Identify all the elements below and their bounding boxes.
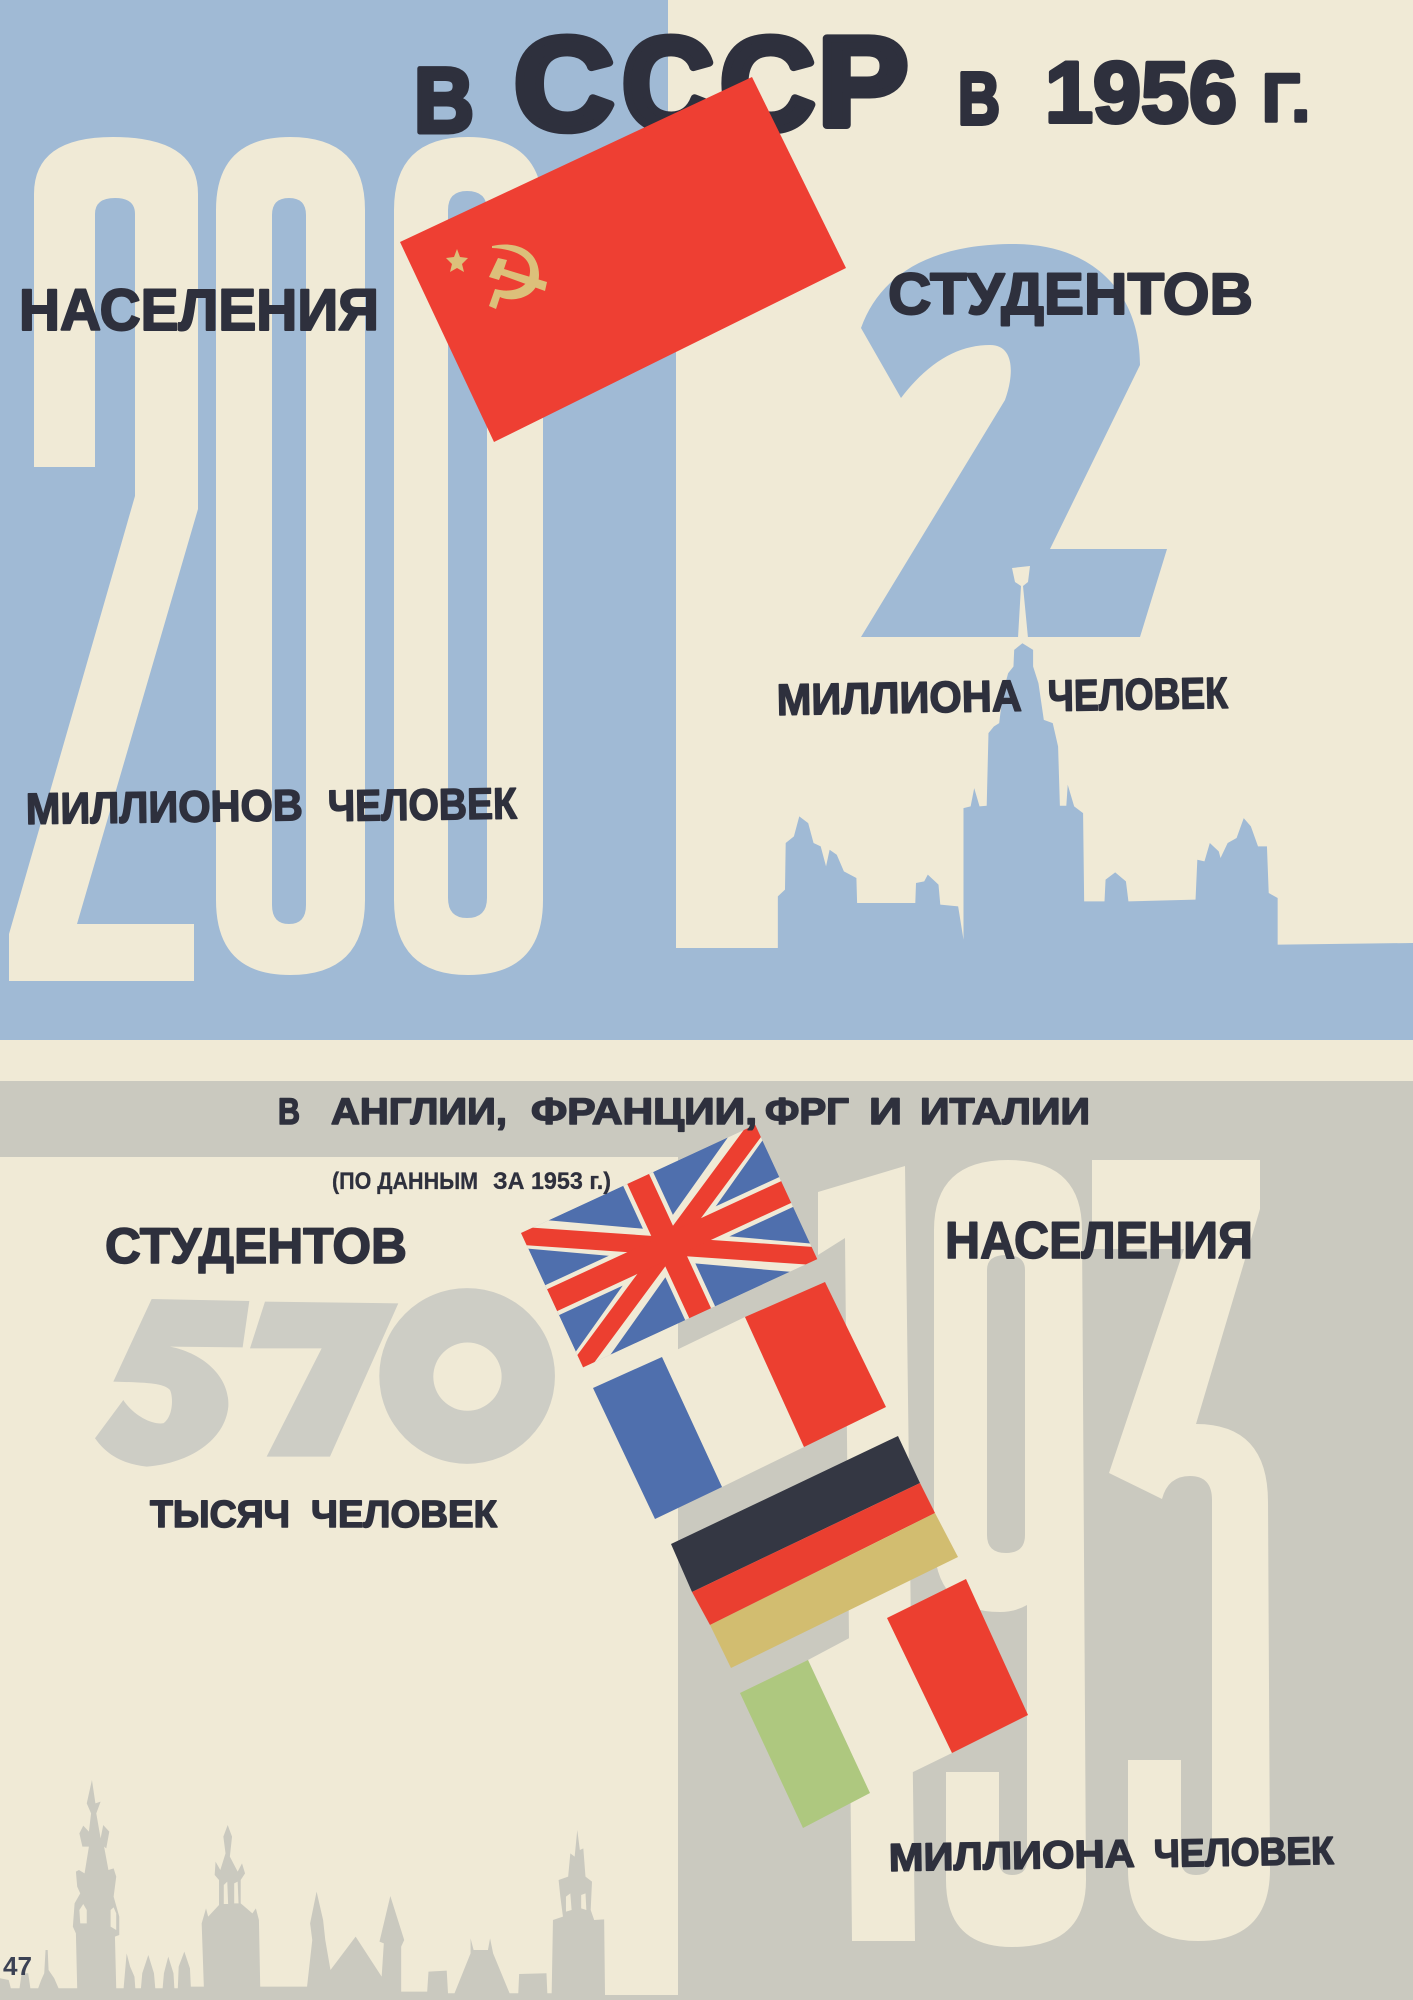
title: Р xyxy=(818,11,908,152)
heading: western countries: АНГЛИИ, xyxy=(331,1091,507,1132)
big number 570 xyxy=(95,1288,555,1467)
big number 2 xyxy=(861,244,1167,637)
big number 193 xyxy=(818,1160,1270,1947)
title: С xyxy=(720,10,815,157)
icon: Italian flag xyxy=(740,1579,1028,1828)
title: 1956 xyxy=(1045,45,1237,141)
text: population label USSR: НАСЕЛЕНИЯ xyxy=(19,278,379,343)
text: two million people: ЧЕЛОВЕК xyxy=(1047,669,1228,721)
text: thousand people: ЧЕЛОВЕК xyxy=(311,1494,498,1536)
text: page number: 47 xyxy=(3,1951,32,1981)
heading: western countries: ФРГ xyxy=(765,1091,849,1132)
text: thousand people: ТЫСЯЧ xyxy=(150,1494,290,1536)
text: million people west: ЧЕЛОВЕК xyxy=(1153,1830,1334,1876)
text: million people USSR: МИЛЛИОНОВ xyxy=(25,781,303,834)
title: В xyxy=(958,57,1000,140)
text: data year note: ЗА 1953 г.) xyxy=(493,1168,611,1195)
text: million people west xyxy=(888,1830,1334,1880)
big number 200 xyxy=(9,137,543,981)
text: two million people xyxy=(776,669,1228,725)
icon: European city skyline xyxy=(0,1780,680,2000)
icon: university spire cut-out xyxy=(1012,566,1030,638)
title: С xyxy=(514,10,614,157)
heading: western countries: ИТАЛИИ xyxy=(920,1091,1090,1132)
icon: West German flag xyxy=(671,1436,958,1668)
text: students label USSR: СТУДЕНТОВ xyxy=(888,262,1253,327)
heading: western countries: В xyxy=(278,1091,300,1132)
text: million people USSR: ЧЕЛОВЕК xyxy=(327,779,517,831)
title xyxy=(414,10,1310,157)
text: population label west: НАСЕЛЕНИЯ xyxy=(945,1212,1253,1270)
heading: western countries xyxy=(278,1091,1090,1132)
panel: western countries grey background xyxy=(0,1081,1413,2000)
text: students label west: СТУДЕНТОВ xyxy=(105,1218,407,1274)
text: thousand people xyxy=(150,1494,498,1536)
text: data year note: (ПО ДАННЫМ xyxy=(332,1168,478,1195)
text: data year note xyxy=(332,1168,611,1195)
icon: French flag xyxy=(593,1282,886,1519)
title: Г. xyxy=(1262,60,1310,136)
icon: Soviet flag xyxy=(400,77,846,442)
title: С xyxy=(622,10,714,157)
icon: Moscow University silhouette xyxy=(778,643,1278,950)
text: million people west: МИЛЛИОНА xyxy=(888,1833,1135,1880)
heading: western countries: И xyxy=(869,1091,902,1132)
icon: British flag xyxy=(516,1122,823,1370)
heading: western countries: ФРАНЦИИ, xyxy=(531,1091,757,1132)
panel: USSR blue background xyxy=(0,0,1413,1040)
title: В xyxy=(414,50,474,152)
text: two million people: МИЛЛИОНА xyxy=(776,672,1022,725)
text: million people USSR xyxy=(25,779,517,834)
